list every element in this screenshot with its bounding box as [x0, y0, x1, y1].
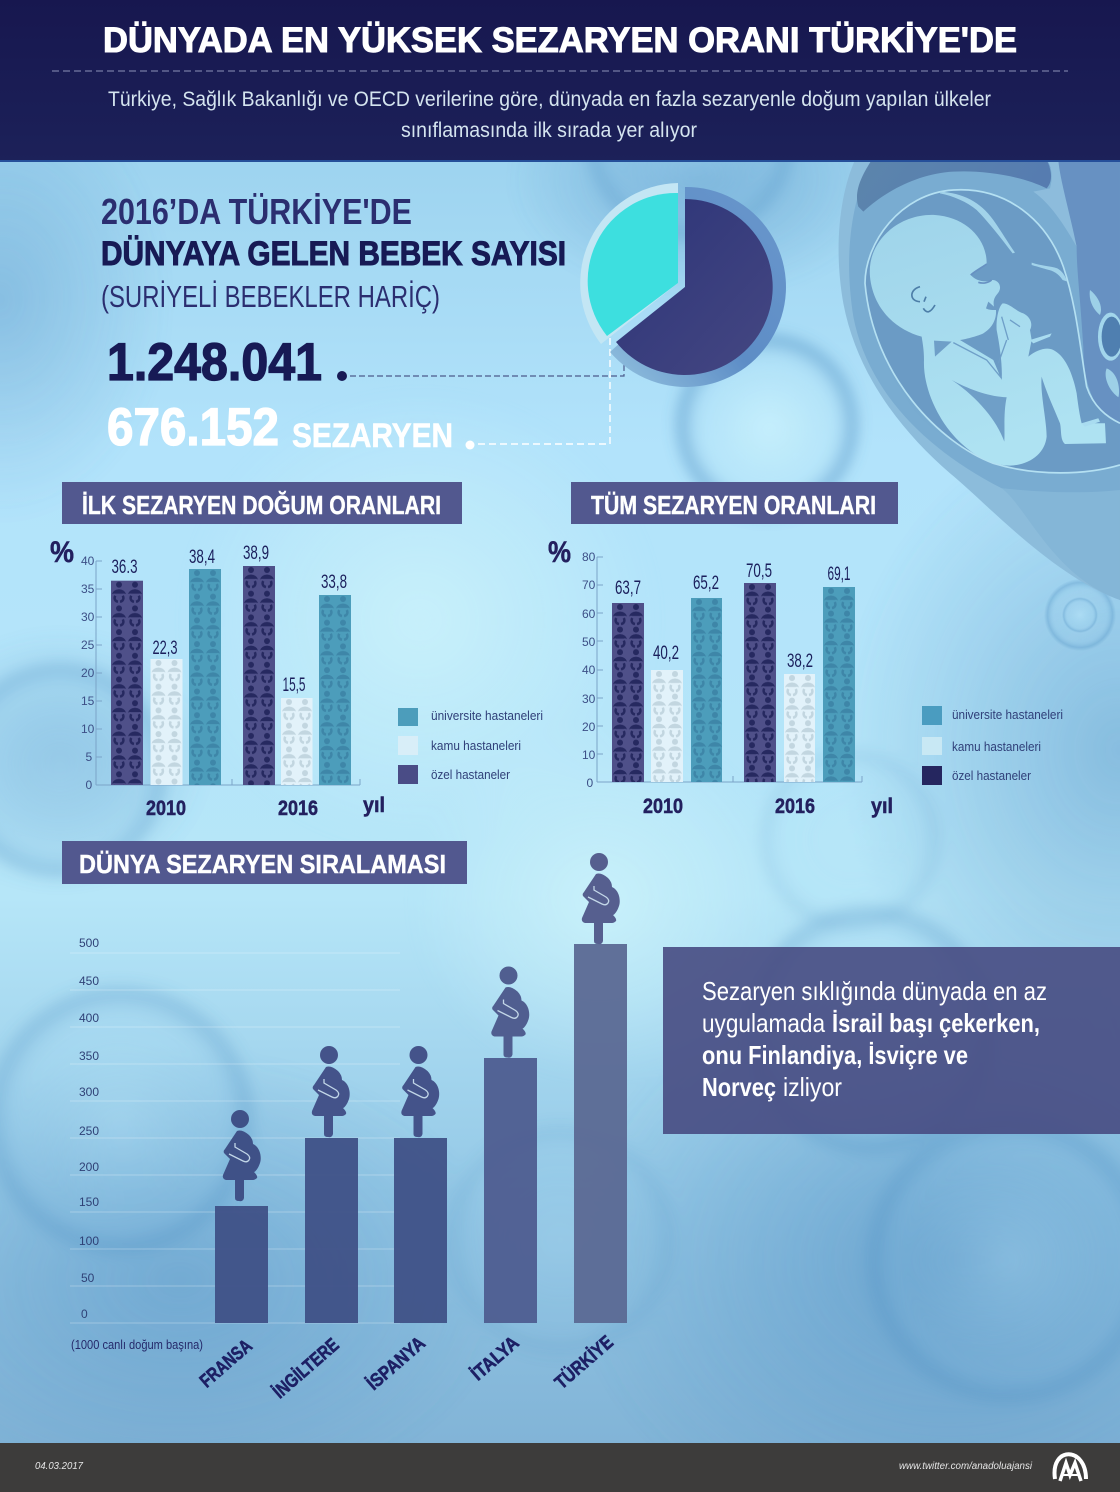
section heading: world caesarean ranking: DÜNYA SEZARYEN SIRALAMASI [79, 849, 446, 879]
bar chart: all caesarean rates [548, 536, 893, 818]
bar chart: all caesarean rates: 38,2 [787, 651, 813, 672]
bar chart: all caesarean rates: 69,1 [828, 564, 850, 585]
bar chart: all caesarean rates: 50 [582, 635, 596, 649]
ranking chart: caesareans per 1000 live births: 350 [79, 1049, 99, 1063]
statistic: caesarean births [107, 398, 474, 457]
bar chart: first caesarean rates: 5 [86, 750, 92, 764]
ranking chart: caesareans per 1000 live births: FRANSA [196, 1335, 257, 1392]
bar chart: all caesarean rates: 40,2 [653, 643, 679, 664]
statistic: caesarean births: SEZARYEN [292, 417, 453, 455]
ranking chart: caesareans per 1000 live births: 0 [81, 1307, 88, 1321]
ranking chart: caesareans per 1000 live births: 300 [79, 1085, 99, 1099]
statistic: caesarean births: 676.152 [107, 398, 279, 457]
ranking chart: caesareans per 1000 live births: 100 [79, 1234, 99, 1248]
bar chart: first caesarean rates: 2016 [278, 797, 318, 820]
headline block: births in 2016: 2016’DA TÜRKİYE'DE [101, 191, 412, 232]
subtitle [108, 88, 991, 142]
section heading: all caesarean rates: TÜM SEZARYEN ORANLARI [591, 490, 876, 520]
ranking chart: caesareans per 1000 live births: İTALYA [467, 1332, 524, 1385]
bar chart: first caesarean rates: 30 [81, 610, 95, 624]
bar chart: first caesarean rates: 38,9 [243, 543, 269, 564]
headline block: births in 2016 [101, 191, 566, 314]
bar chart: first caesarean rates: 10 [81, 722, 95, 736]
twitter address: www.twitter.com/anadoluajansi [899, 1461, 1033, 1472]
bar chart: first caesarean rates: 40 [81, 554, 95, 568]
bar chart: all caesarean rates: 63,7 [615, 578, 641, 599]
callout: lowest caesarean countries: Sezaryen sıklığında dünyada en az [702, 976, 1047, 1006]
callout: lowest caesarean countries: onu Finlandiya, İsviçre ve [702, 1040, 968, 1070]
ranking chart: caesareans per 1000 live births [70, 853, 627, 1403]
footer bar [0, 1443, 1120, 1492]
section heading: all caesarean rates [571, 482, 898, 524]
ranking chart: caesareans per 1000 live births: 500 [79, 936, 99, 950]
bar chart: all caesarean rates: 2010 [643, 795, 683, 818]
bar chart: all caesarean rates: 70,5 [746, 561, 772, 582]
ranking chart: caesareans per 1000 live births: 400 [79, 1011, 99, 1025]
bar chart: first caesarean rates: 15 [81, 694, 95, 708]
leader line: caesarean to pie [478, 335, 610, 444]
title: DÜNYADA EN YÜKSEK SEZARYEN ORANI TÜRKİYE'DE [103, 21, 1017, 60]
ranking chart: caesareans per 1000 live births: İSPANYA [363, 1333, 430, 1395]
ranking chart: caesareans per 1000 live births: TÜRKİYE [551, 1332, 618, 1394]
bar chart: first caesarean rates: 20 [81, 666, 95, 680]
placental detail [1090, 290, 1119, 397]
section heading: first caesarean rates: İLK SEZARYEN DOĞUM ORANLARI [82, 490, 441, 520]
callout: lowest caesarean countries: izliyor [783, 1072, 842, 1102]
bar chart: all caesarean rates: 0 [586, 776, 594, 790]
ranking chart: caesareans per 1000 live births: 250 [79, 1124, 99, 1138]
leader line: total to pie [350, 340, 624, 376]
bar chart: all caesarean rates: 70 [582, 578, 596, 592]
bar chart: first caesarean rates [50, 536, 385, 820]
callout: lowest caesarean countries: uygulamada [702, 1008, 825, 1038]
bar chart: all caesarean rates: 2016 [775, 795, 815, 818]
ranking chart: caesareans per 1000 live births: 50 [81, 1271, 95, 1285]
bar chart: all caesarean rates: % [548, 536, 571, 569]
legend: all caesarean rates [922, 706, 1063, 785]
section heading: world caesarean ranking [62, 841, 467, 884]
section heading: first caesarean rates [62, 482, 462, 524]
headline block: births in 2016: DÜNYAYA GELEN BEBEK SAYISI [101, 235, 566, 273]
bar chart: all caesarean rates: 60 [582, 607, 596, 621]
headline block: births in 2016: (SURİYELİ BEBEKLER HARİÇ) [101, 279, 440, 314]
legend: all caesarean rates: özel hastaneler [952, 768, 1032, 783]
ranking chart: caesareans per 1000 live births: 200 [79, 1160, 99, 1174]
date: 04.03.2017 [35, 1461, 83, 1472]
legend: first caesarean rates: özel hastaneler [431, 767, 511, 782]
bar chart: all caesarean rates: 30 [582, 692, 596, 706]
subtitle: Türkiye, Sağlık Bakanlığı ve OECD verilerine göre, dünyada en fazla sezaryenle doğum yapılan ülkeler [108, 88, 991, 111]
ranking chart: caesareans per 1000 live births: İNGİLTERE [269, 1335, 343, 1403]
bar chart: first caesarean rates: 15,5 [282, 675, 306, 696]
bar chart: first caesarean rates: 0 [86, 778, 92, 792]
ranking chart: caesareans per 1000 live births: (1000 canlı doğum başına) [71, 1337, 203, 1352]
bar chart: first caesarean rates: 22,3 [152, 638, 178, 659]
bar chart: first caesarean rates: yıl [363, 794, 385, 817]
callout: lowest caesarean countries: Norveç [702, 1072, 776, 1102]
bar chart: first caesarean rates: 35 [81, 582, 95, 596]
bar chart: first caesarean rates: 36.3 [112, 557, 138, 578]
legend: first caesarean rates: kamu hastaneleri [431, 738, 521, 753]
bar chart: first caesarean rates: 33,8 [321, 572, 347, 593]
bar chart: first caesarean rates: 2010 [146, 797, 186, 820]
legend: first caesarean rates: üniversite hastaneleri [431, 708, 543, 723]
bar chart: all caesarean rates: 10 [582, 748, 596, 762]
bar chart: all caesarean rates: 65,2 [693, 573, 719, 594]
legend: all caesarean rates: üniversite hastaneleri [952, 707, 1063, 722]
subtitle: sınıflamasında ilk sırada yer alıyor [401, 119, 697, 142]
header banner [0, 0, 1120, 162]
ranking chart: caesareans per 1000 live births: 150 [79, 1195, 99, 1209]
bar chart: all caesarean rates: 20 [582, 720, 596, 734]
callout: lowest caesarean countries: İsrail başı çekerken, [832, 1008, 1040, 1038]
statistic: total births: 1.248.041 [107, 333, 322, 392]
bar chart: all caesarean rates: yıl [871, 795, 893, 818]
bar chart: first caesarean rates: 25 [81, 638, 95, 652]
legend: first caesarean rates [398, 708, 543, 784]
bar chart: all caesarean rates: 80 [582, 550, 596, 564]
illustration: fetus in womb [839, 160, 1120, 600]
bar chart: first caesarean rates: % [50, 536, 74, 569]
legend: all caesarean rates: kamu hastaneleri [952, 739, 1041, 754]
bar chart: first caesarean rates: 38,4 [189, 547, 215, 568]
pie chart [580, 183, 786, 387]
logo: Anadolu Ajansı [1055, 1454, 1086, 1481]
bar chart: all caesarean rates: 40 [582, 663, 596, 677]
ranking chart: caesareans per 1000 live births: 450 [79, 974, 99, 988]
fetus body [870, 215, 1106, 466]
callout: lowest caesarean countries [663, 947, 1120, 1134]
